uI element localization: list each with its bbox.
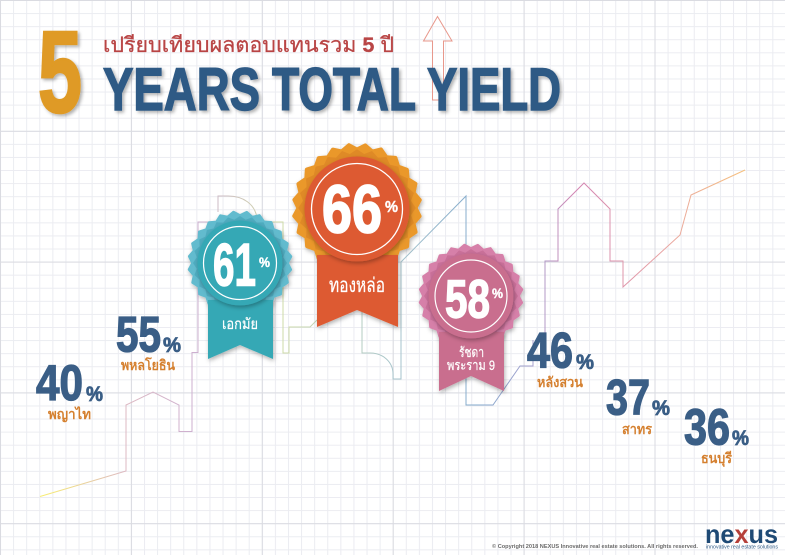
title: years total yield: YEARS (103, 56, 260, 123)
ribbon (439, 332, 504, 391)
title number 5: 5 (38, 7, 82, 137)
badge value: 66 (322, 172, 382, 248)
title: years total yield: TOTAL (272, 56, 416, 123)
badge ring (435, 260, 507, 332)
badge label: เอกมัย (222, 316, 258, 333)
title: years total yield (103, 56, 561, 123)
badge label: รัชดา (459, 344, 484, 360)
stat: สาทร 37%: 37 (606, 370, 650, 426)
stat: หลังสวน 46% (527, 322, 594, 390)
badge value: 61 (213, 232, 256, 298)
stat: หลังสวน 46%: หลังสวน (537, 374, 583, 390)
stat: ธนบุรี 36%: % (732, 427, 749, 450)
stat: ธนบุรี 36%: 36 (684, 398, 730, 456)
stat: หลังสวน 46%: % (576, 351, 594, 374)
rosette gear (286, 137, 428, 279)
badge ring (312, 164, 402, 254)
badge percent: % (259, 254, 270, 270)
badge circle (304, 156, 410, 262)
copyright: © Copyright 2018 NEXUS Innovative real estate solutions. All rights reserved. (492, 543, 698, 550)
stat: พญาไท 40% (36, 355, 103, 423)
ribbon (208, 300, 273, 359)
stat: พญาไท 40%: 40 (36, 355, 83, 411)
stat: สาทร 37%: สาทร (622, 421, 652, 437)
stat: พญาไท 40%: % (86, 383, 103, 406)
badge circle (198, 220, 282, 306)
badge circle (428, 254, 514, 338)
badge percent: % (492, 285, 503, 301)
rosette: รัชดา พระราม 9 58% (414, 239, 528, 391)
badge value: 58 (445, 270, 490, 330)
badge label (447, 344, 495, 373)
rosette: ทองหล่อ 66% (286, 137, 428, 327)
title: years total yield: YIELD (427, 56, 561, 123)
stat: ธนบุรี 36%: ธนบุรี (701, 450, 732, 467)
stat: พหลโยธิน 55%: พหลโยธิน (121, 356, 175, 373)
Thai subtitle: เปรียบเทียบผลตอบแทนรวม 5 ปี (103, 34, 394, 57)
rosette: เอกมัย 61% (183, 206, 297, 359)
badge ring (204, 226, 276, 300)
skyline line chart (40, 170, 745, 496)
badge label: พระราม 9 (447, 357, 495, 373)
logo: nexus: nexus (705, 519, 778, 549)
rosette gear (414, 239, 528, 353)
stat: หลังสวน 46%: 46 (527, 322, 573, 378)
badge label: ทองหล่อ (329, 275, 385, 297)
stat: พหลโยธิน 55%: 55 (116, 306, 161, 362)
stat: สาทร 37%: % (652, 397, 670, 420)
stat: พญาไท 40%: พญาไท (48, 405, 91, 423)
icon: up arrow (424, 16, 452, 100)
badge percent: % (385, 199, 398, 216)
stat: พหลโยธิน 55%: % (163, 334, 181, 357)
logo: nexus: innovative real estate solutions (706, 544, 778, 550)
ribbon (317, 255, 398, 327)
rosette gear (183, 206, 297, 320)
